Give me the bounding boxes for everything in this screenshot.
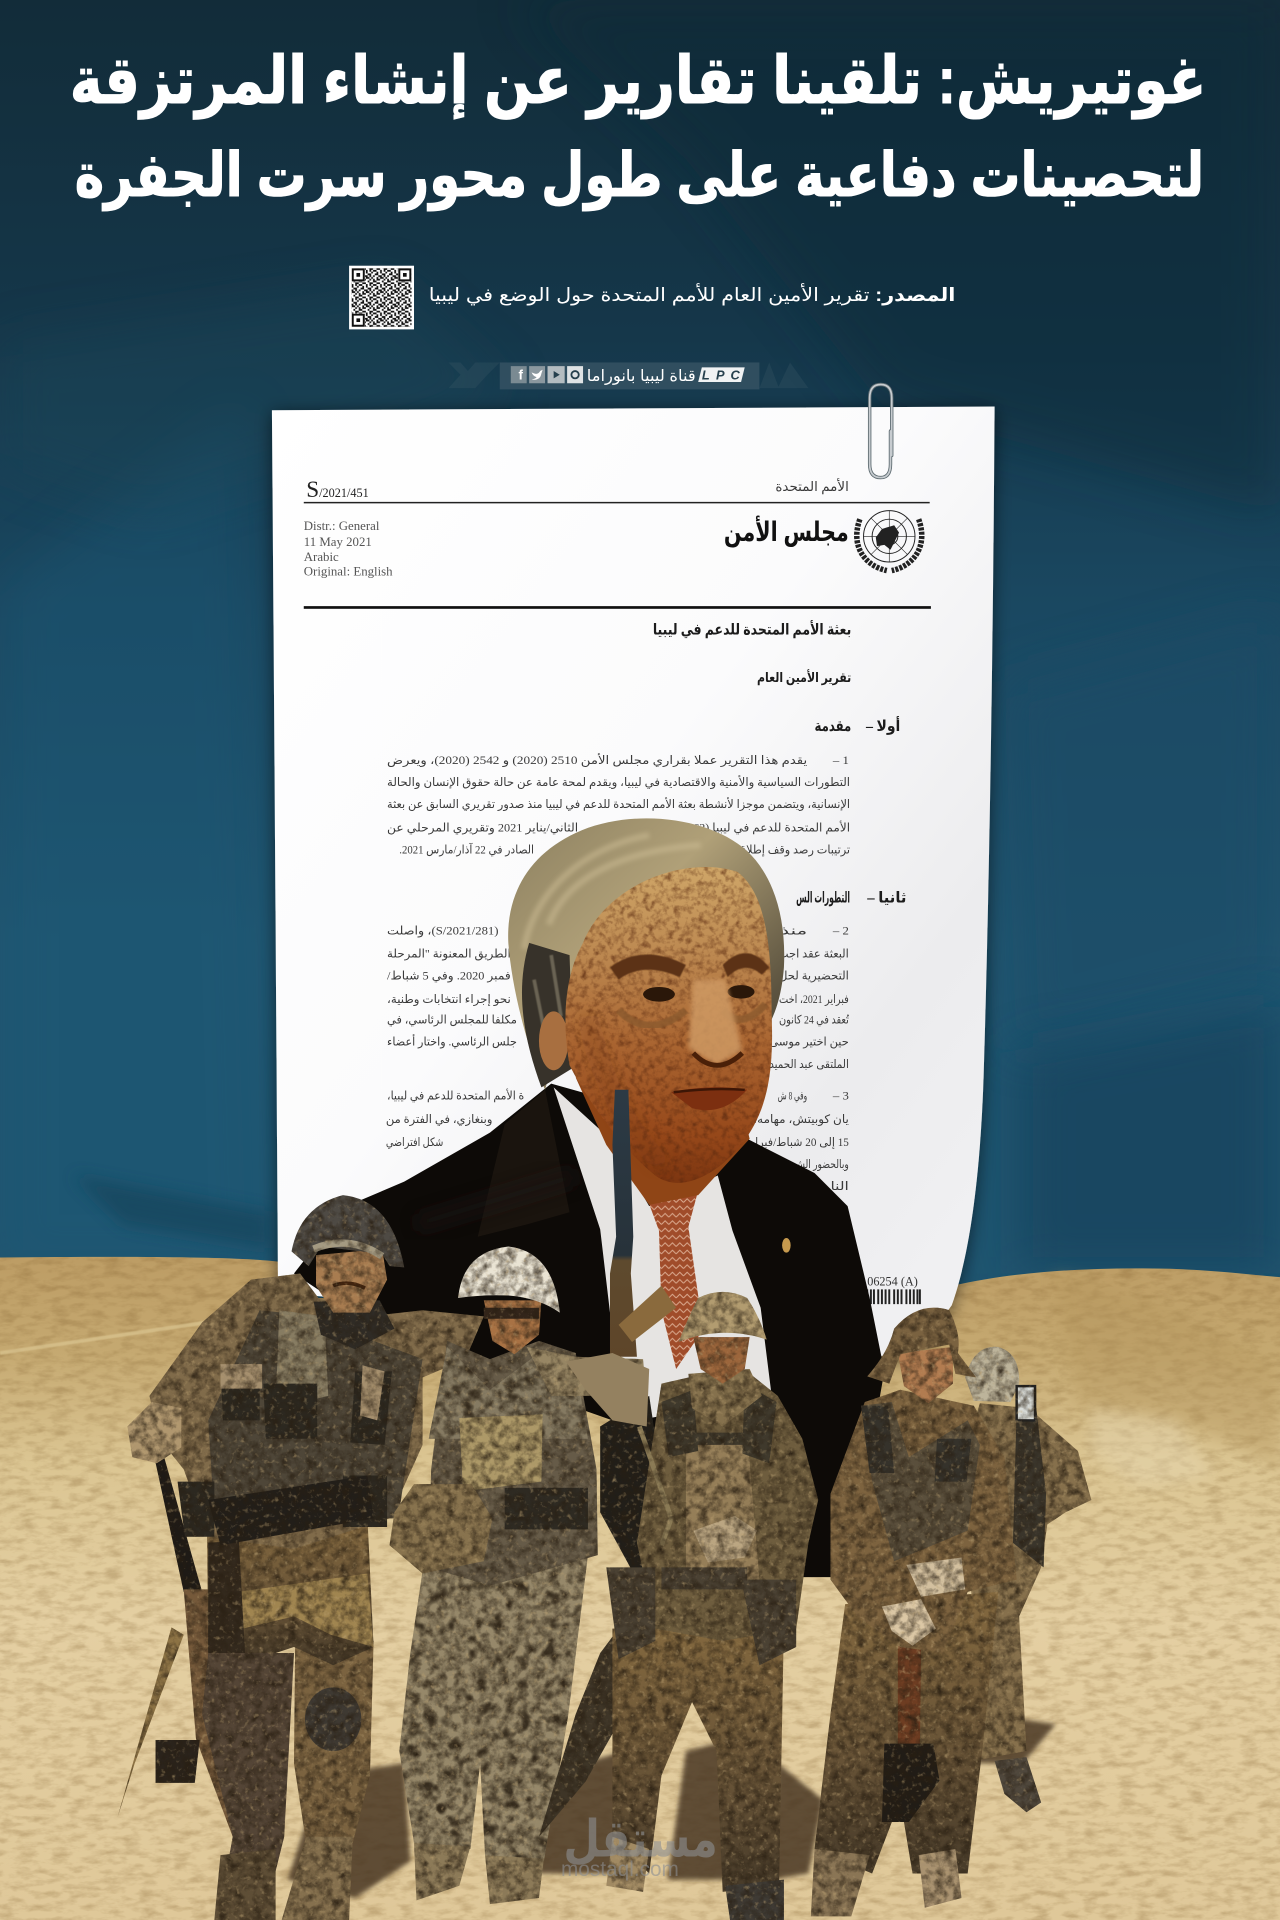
trousers: [207, 1518, 374, 1665]
boots: [282, 1837, 353, 1920]
body: [959, 1403, 1091, 1760]
side bag: [390, 1484, 492, 1573]
portrait: António Guterres: [294, 818, 884, 1577]
helmet: [965, 1347, 1019, 1402]
paragraph 1: [387, 753, 850, 857]
sand dunes and ground: [0, 1255, 1280, 1920]
report heading: تقرير الأمين العام: [757, 669, 851, 686]
paragraph 2: (S/2021/281)، واصلت: [387, 924, 499, 938]
paragraph 2: 2 –: [832, 924, 849, 937]
icon: UN emblem: [857, 511, 922, 571]
watermark: Mostaql: مستقل: [563, 1809, 718, 1867]
tie: [647, 1195, 703, 1369]
shirt: [554, 1087, 772, 1420]
face: [693, 1337, 750, 1384]
rifle held upright: [610, 1090, 676, 1357]
paragraph 3: شكل افتراضي: [386, 1136, 443, 1150]
gloved hand: [693, 1516, 757, 1562]
icon: paperclip: [870, 384, 892, 478]
channel name: قناة ليبيا بانوراما: [587, 368, 696, 386]
boot: [995, 1757, 1041, 1812]
face: [484, 1300, 541, 1354]
hood/collar: [688, 1369, 762, 1427]
arm across: [527, 1347, 649, 1427]
ground shadows: [288, 1712, 1056, 1898]
paragraph 2: منذ: [780, 924, 807, 937]
face: [565, 867, 772, 1183]
soldier 2 (white helmet): [390, 1247, 649, 1904]
pouches: [178, 1365, 392, 1537]
rifle wrap: [184, 1589, 276, 1886]
paragraph 3: 3 –: [832, 1090, 849, 1103]
radio: [1017, 1386, 1035, 1420]
paragraph 1: الأمم المتحدة للدعم في ليبيا (62: [693, 820, 850, 834]
trousers: [612, 1622, 784, 1892]
paper sheet: [272, 407, 995, 1359]
paragraph 1: 1 –: [832, 754, 849, 767]
section one heading: مقدمة: [815, 718, 851, 735]
torso: [429, 1341, 598, 1586]
bucket hat: [679, 1292, 767, 1342]
social icons: [511, 366, 583, 383]
distribution block: Distr.: General: [304, 519, 380, 533]
Security Council heading: مجلس الأمن: [724, 515, 849, 548]
white helmet: [458, 1247, 560, 1313]
document number: 06254 (A): [867, 1275, 918, 1289]
scarf: [314, 1300, 394, 1349]
paragraph 2: [387, 924, 849, 1071]
brand strip: LPC social bar: [448, 362, 808, 389]
dark sleeve: [600, 1396, 668, 1580]
paragraph 1: الصادر في 22 آذار/مارس 2021.: [399, 842, 534, 857]
QR code: [349, 266, 414, 329]
section two heading: ثانيا –: [866, 889, 906, 906]
hand: [127, 1402, 181, 1463]
paragraph 3: وبنغازي، في الفترة من: [386, 1113, 492, 1127]
paragraph 2: نحو إجراء انتخابات وطنية،: [387, 993, 511, 1007]
paragraph 1: يقدم هذا التقرير عملا بقراري مجلس الأمن 2510 (2020) و 2542 (2020)، ويعرض: [387, 753, 807, 768]
hand on shoulder: [566, 1353, 649, 1427]
paragraph 2: جلس الرئاسي. واختار أعضاء: [387, 1034, 517, 1050]
social icons: f: [519, 368, 524, 383]
bucket hat: [867, 1308, 976, 1384]
soldier 5 (rear right): [959, 1347, 1091, 1812]
digital camo trousers: [399, 1555, 588, 1861]
soldier 3 (center, bucket hat): [539, 1292, 818, 1920]
rifle barrel: [154, 1457, 202, 1592]
helmet: [292, 1195, 404, 1267]
paragraph 3: 15 إلى 20 شباط/فبراير: [745, 1136, 849, 1150]
lapel pin: [782, 1238, 791, 1253]
paragraph 2: فمبر 2020. وفي 5 شباط/: [387, 970, 511, 984]
paragraph 2: مكلفا للمجلس الرئاسي، في: [387, 1014, 517, 1028]
LPC logo: L P C: [702, 368, 741, 383]
right leg: [294, 1641, 374, 1843]
title: [70, 44, 1207, 211]
paragraph 2: الطريق المعنونة "المرحلة: [387, 948, 511, 962]
strap: [118, 1627, 184, 1817]
ear: [539, 1011, 568, 1070]
vest: [208, 1298, 423, 1518]
gloves: [906, 1558, 965, 1597]
paragraph 2: تُعقد في 24 كانون: [779, 1014, 849, 1028]
distribution block: Arabic: [304, 550, 339, 564]
face: [316, 1249, 387, 1313]
rifle lower: [882, 1744, 939, 1822]
harness straps: [661, 1384, 777, 1463]
soldier 4 (front right): [811, 1308, 1017, 1916]
section one heading: [815, 716, 900, 735]
jacket and arm: [149, 1273, 484, 1549]
rear sling and rifle: [539, 1580, 661, 1837]
rifle butt: [156, 1740, 200, 1783]
plate carrier: [459, 1414, 543, 1491]
paragraph 1: التطورات السياسية والأمنية والاقتصادية في ليبيا، ويقدم لمحة عامة عن حالة حقوق الإنسان والحالة: [387, 775, 850, 790]
paragraph 3: النا: [830, 1180, 849, 1193]
paragraph 3: وبالحضور الش: [794, 1158, 849, 1172]
knee pad: [305, 1687, 361, 1751]
boots: [414, 1843, 470, 1900]
hair: [508, 818, 784, 1090]
belt: [208, 1476, 374, 1545]
paragraph 1: الثاني/يناير 2021 وتقريري المرحلي عن: [387, 821, 578, 835]
distribution block: [304, 519, 393, 579]
paragraph 2: البعثة عقد اجت: [778, 948, 849, 961]
paragraph 2: حين اختير موسى: [769, 1036, 849, 1050]
trousers: [815, 1592, 998, 1873]
source line: المصدر: تقرير الأمين العام للأمم المتحدة حول الوضع في ليبيا: [429, 283, 955, 306]
paper document: [272, 407, 995, 1359]
lower left leg: [202, 1653, 294, 1904]
header: United Nations: الأمم المتحدة: [775, 478, 849, 495]
section two heading: التطورات الس: [796, 889, 850, 906]
magazine: [619, 1286, 676, 1342]
rifle wood: [898, 1646, 921, 1746]
magazine pouches: [505, 1488, 588, 1529]
paragraph 3: [386, 1089, 849, 1193]
vest: [861, 1402, 980, 1561]
sling loop: [639, 1427, 671, 1545]
paragraph 2: الملتقى عبد الحميد: [769, 1058, 849, 1071]
document header symbol: S/2021/451: [306, 477, 369, 503]
neck: [576, 1078, 750, 1205]
watermark: Mostaql: mostaql.com: [561, 1858, 679, 1881]
paragraph 3: يان كوبيتش، مهامه،: [753, 1113, 849, 1127]
paragraph 2: فبراير 2021، اخت: [779, 993, 849, 1007]
barcode: [867, 1289, 920, 1304]
paragraph 3: وفي 8 ش: [778, 1090, 807, 1104]
paragraph 2: التحضيرية لحل: [779, 970, 849, 984]
facial features: [588, 953, 769, 1163]
suit jacket: [294, 1084, 884, 1577]
mission heading: بعثة الأمم المتحدة للدعم في ليبيا: [653, 619, 851, 639]
paragraph 1: الإنسانية، ويتضمن موجزا لأنشطة بعثة الأمم المتحدة للدعم في ليبيا منذ صدور تقريري السابق عن بعثة: [387, 797, 850, 812]
watermark: Mostaql: [561, 1809, 718, 1881]
section one heading: أولا –: [865, 716, 900, 735]
boots: [811, 1849, 870, 1916]
distribution block: Original: English: [304, 565, 393, 579]
belt pouches: [606, 1567, 796, 1665]
jacket: [637, 1371, 818, 1641]
boots: [606, 1837, 649, 1892]
soldier 1 (left): [118, 1195, 484, 1920]
paragraph 1: ترتيبات رصد وقف إطلاق: [737, 843, 850, 857]
face: [898, 1347, 953, 1403]
distribution block: 11 May 2021: [304, 535, 372, 549]
jacket: [830, 1390, 1017, 1653]
background: dark blue crumpled cloth: [0, 0, 1280, 1347]
paragraph 3: ة الأمم المتحدة للدعم في ليبيا،: [387, 1089, 524, 1103]
